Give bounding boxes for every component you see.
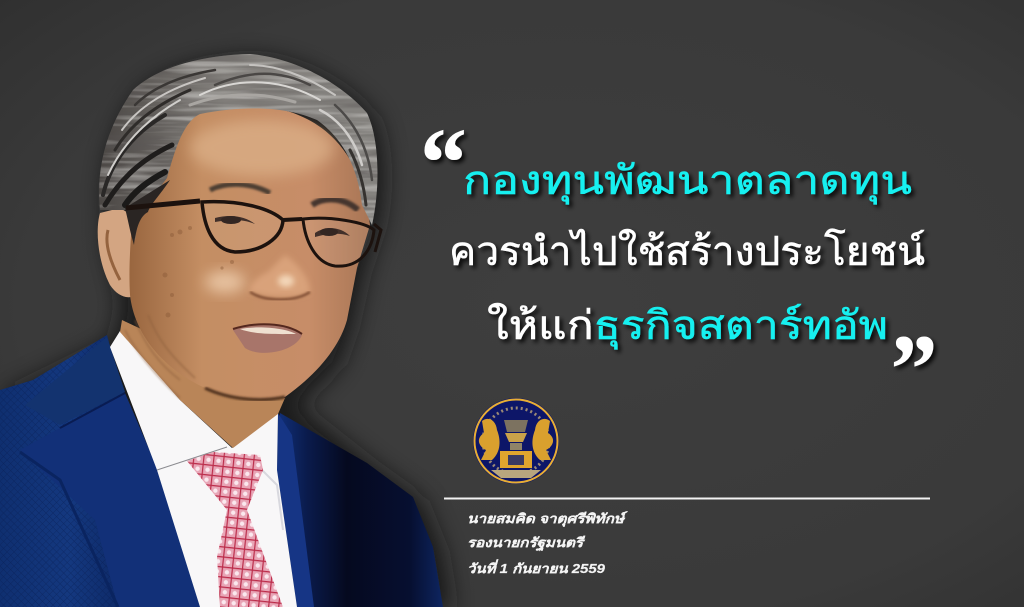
hair texture <box>90 50 390 240</box>
jacket <box>0 335 200 607</box>
neck <box>120 320 285 448</box>
chin shadow <box>205 388 285 400</box>
shirt <box>110 331 297 607</box>
lapels <box>25 337 125 425</box>
date: วันที่ 1 กันยายน 2559 <box>467 559 606 576</box>
caption <box>467 511 628 576</box>
eyebrows <box>210 184 270 193</box>
opening quotation mark: “ <box>415 107 465 218</box>
divider line <box>444 498 930 500</box>
emblem: left lion <box>479 419 500 460</box>
ear <box>98 208 140 297</box>
emblem: pedestal <box>500 451 532 468</box>
glasses <box>126 201 381 266</box>
mouth <box>233 324 302 353</box>
cheek highlight <box>205 271 245 293</box>
tie <box>187 452 283 607</box>
neck wrinkles <box>125 315 195 398</box>
quote text <box>449 159 925 350</box>
emblem: right lion <box>532 419 553 460</box>
line 2: ควรนำไปใช้สร้างประโยชน์ <box>449 228 925 274</box>
position: รองนายกรัฐมนตรี <box>467 535 585 552</box>
sideburn <box>125 180 170 245</box>
forehead highlight <box>190 120 334 176</box>
hair strands <box>103 65 372 205</box>
eyes <box>215 216 255 224</box>
portrait shadow <box>7 58 452 607</box>
emblem <box>473 398 559 484</box>
face <box>129 105 370 400</box>
emblem: central bowl <box>504 420 528 432</box>
line 1: กองทุนพัฒนาตลาดทุน <box>463 159 912 205</box>
nose <box>250 255 310 296</box>
portrait: man in blue suit <box>0 50 452 607</box>
line 3: ให้แก่ ธุรกิจสตาร์ทอัพ <box>487 302 888 350</box>
emblem: base band <box>491 470 541 478</box>
name: นายสมคิด จาตุศรีพิทักษ์ <box>467 511 628 527</box>
freckles <box>162 226 234 318</box>
hair <box>99 54 377 240</box>
closing quotation mark: ” <box>885 314 935 425</box>
